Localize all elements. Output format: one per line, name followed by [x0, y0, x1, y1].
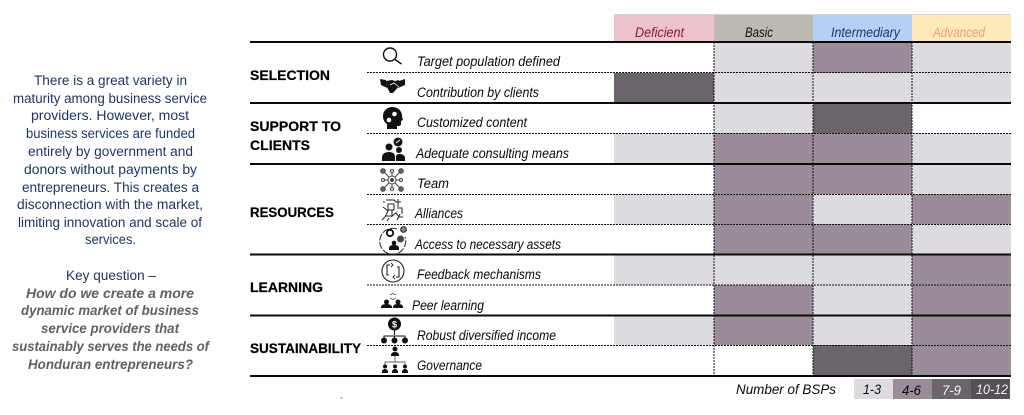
header: Deficient	[614, 15, 714, 42]
row labels: Peer learning	[412, 298, 484, 314]
legend swatch: 7-9	[932, 379, 971, 399]
row labels: Robust diversified income	[417, 328, 556, 344]
category labels: SELECTION	[250, 68, 330, 83]
legend swatch: 4-6	[893, 379, 932, 399]
text block: context paragraph: donors without payments by	[24, 162, 198, 178]
text block: context paragraph: maturity among business service	[13, 91, 207, 107]
header: Advanced	[912, 15, 1011, 42]
text block: context paragraph	[13, 73, 207, 284]
row labels	[412, 54, 569, 374]
header: Deficient: Deficient	[635, 25, 685, 41]
header: Intermediary: Intermediary	[831, 25, 901, 41]
text block: context paragraph: entrepreneurs. This creates a	[22, 180, 199, 196]
category labels: SUPPORT TO	[250, 119, 341, 134]
legend swatch: 7-9: 7-9	[942, 383, 961, 399]
text block: context paragraph: limiting innovation and scale of	[18, 215, 202, 231]
icon: consulting people	[382, 138, 405, 161]
text block: context paragraph: disconnection with the market,	[17, 197, 203, 213]
heatmap cells	[614, 42, 1011, 376]
category labels	[250, 68, 361, 356]
header: Advanced: Advanced	[932, 25, 986, 41]
row labels: Team	[417, 176, 449, 192]
category labels: CLIENTS	[250, 138, 310, 153]
header: Intermediary	[813, 15, 912, 42]
text block: context paragraph: entirely by government and	[28, 144, 193, 160]
row labels: Access to necessary assets	[414, 237, 561, 253]
row labels: Governance	[417, 358, 482, 374]
text block: key question: dynamic market of business	[21, 303, 199, 319]
icon: head with gears	[383, 107, 403, 129]
text block: key question: sustainably serves the needs of	[12, 339, 210, 355]
row labels: Adequate consulting means	[415, 146, 569, 162]
text block: key question: Honduran entrepreneurs?	[28, 357, 193, 373]
icon: alliances maze	[382, 199, 403, 221]
row labels: Alliances	[414, 206, 463, 222]
icon: diversified income	[381, 318, 408, 344]
legend swatch: 1-3	[854, 379, 893, 399]
legend swatch: 10-12	[971, 379, 1010, 399]
legend swatch: 1-3: 1-3	[863, 382, 881, 398]
text block: key question: service providers that	[41, 321, 180, 337]
row labels: Customized content	[417, 115, 528, 131]
icon: magnifier	[384, 48, 402, 64]
row labels: Target population defined	[417, 54, 561, 70]
text block: context paragraph: business services are funded	[26, 126, 195, 142]
text block: context paragraph: There is a great variety in	[34, 73, 187, 89]
icon: peer learning	[381, 294, 403, 308]
icon: diversified income: $	[392, 320, 397, 330]
text block: context paragraph: services.	[85, 232, 136, 248]
row labels: Contribution by clients	[417, 85, 539, 101]
icon: handshake	[380, 79, 405, 93]
legend: number of BSPs	[736, 379, 1010, 399]
legend swatch: 10-12: 10-12	[976, 382, 1008, 398]
icon: team network	[381, 169, 403, 191]
text block: key question: How do we create a more	[26, 286, 194, 302]
category labels: RESOURCES	[250, 205, 334, 220]
icon: assets circle	[380, 227, 406, 254]
panel: intro text	[12, 73, 210, 373]
icon: governance chart	[382, 346, 408, 373]
header: Basic	[714, 15, 813, 42]
row labels: Feedback mechanisms	[417, 267, 541, 283]
header: Basic: Basic	[745, 25, 773, 41]
legend: number of BSPs: Number of BSPs	[736, 382, 836, 398]
text block: key question	[12, 286, 210, 373]
category labels: LEARNING	[250, 280, 323, 295]
icon: feedback cycle	[382, 260, 404, 282]
text block: context paragraph: Key question –	[66, 268, 156, 284]
category labels: SUSTAINABILITY	[250, 341, 361, 356]
column headers	[614, 14, 1011, 42]
legend swatch: 4-6: 4-6	[902, 383, 921, 399]
text block: context paragraph: providers. However, most	[31, 108, 189, 124]
